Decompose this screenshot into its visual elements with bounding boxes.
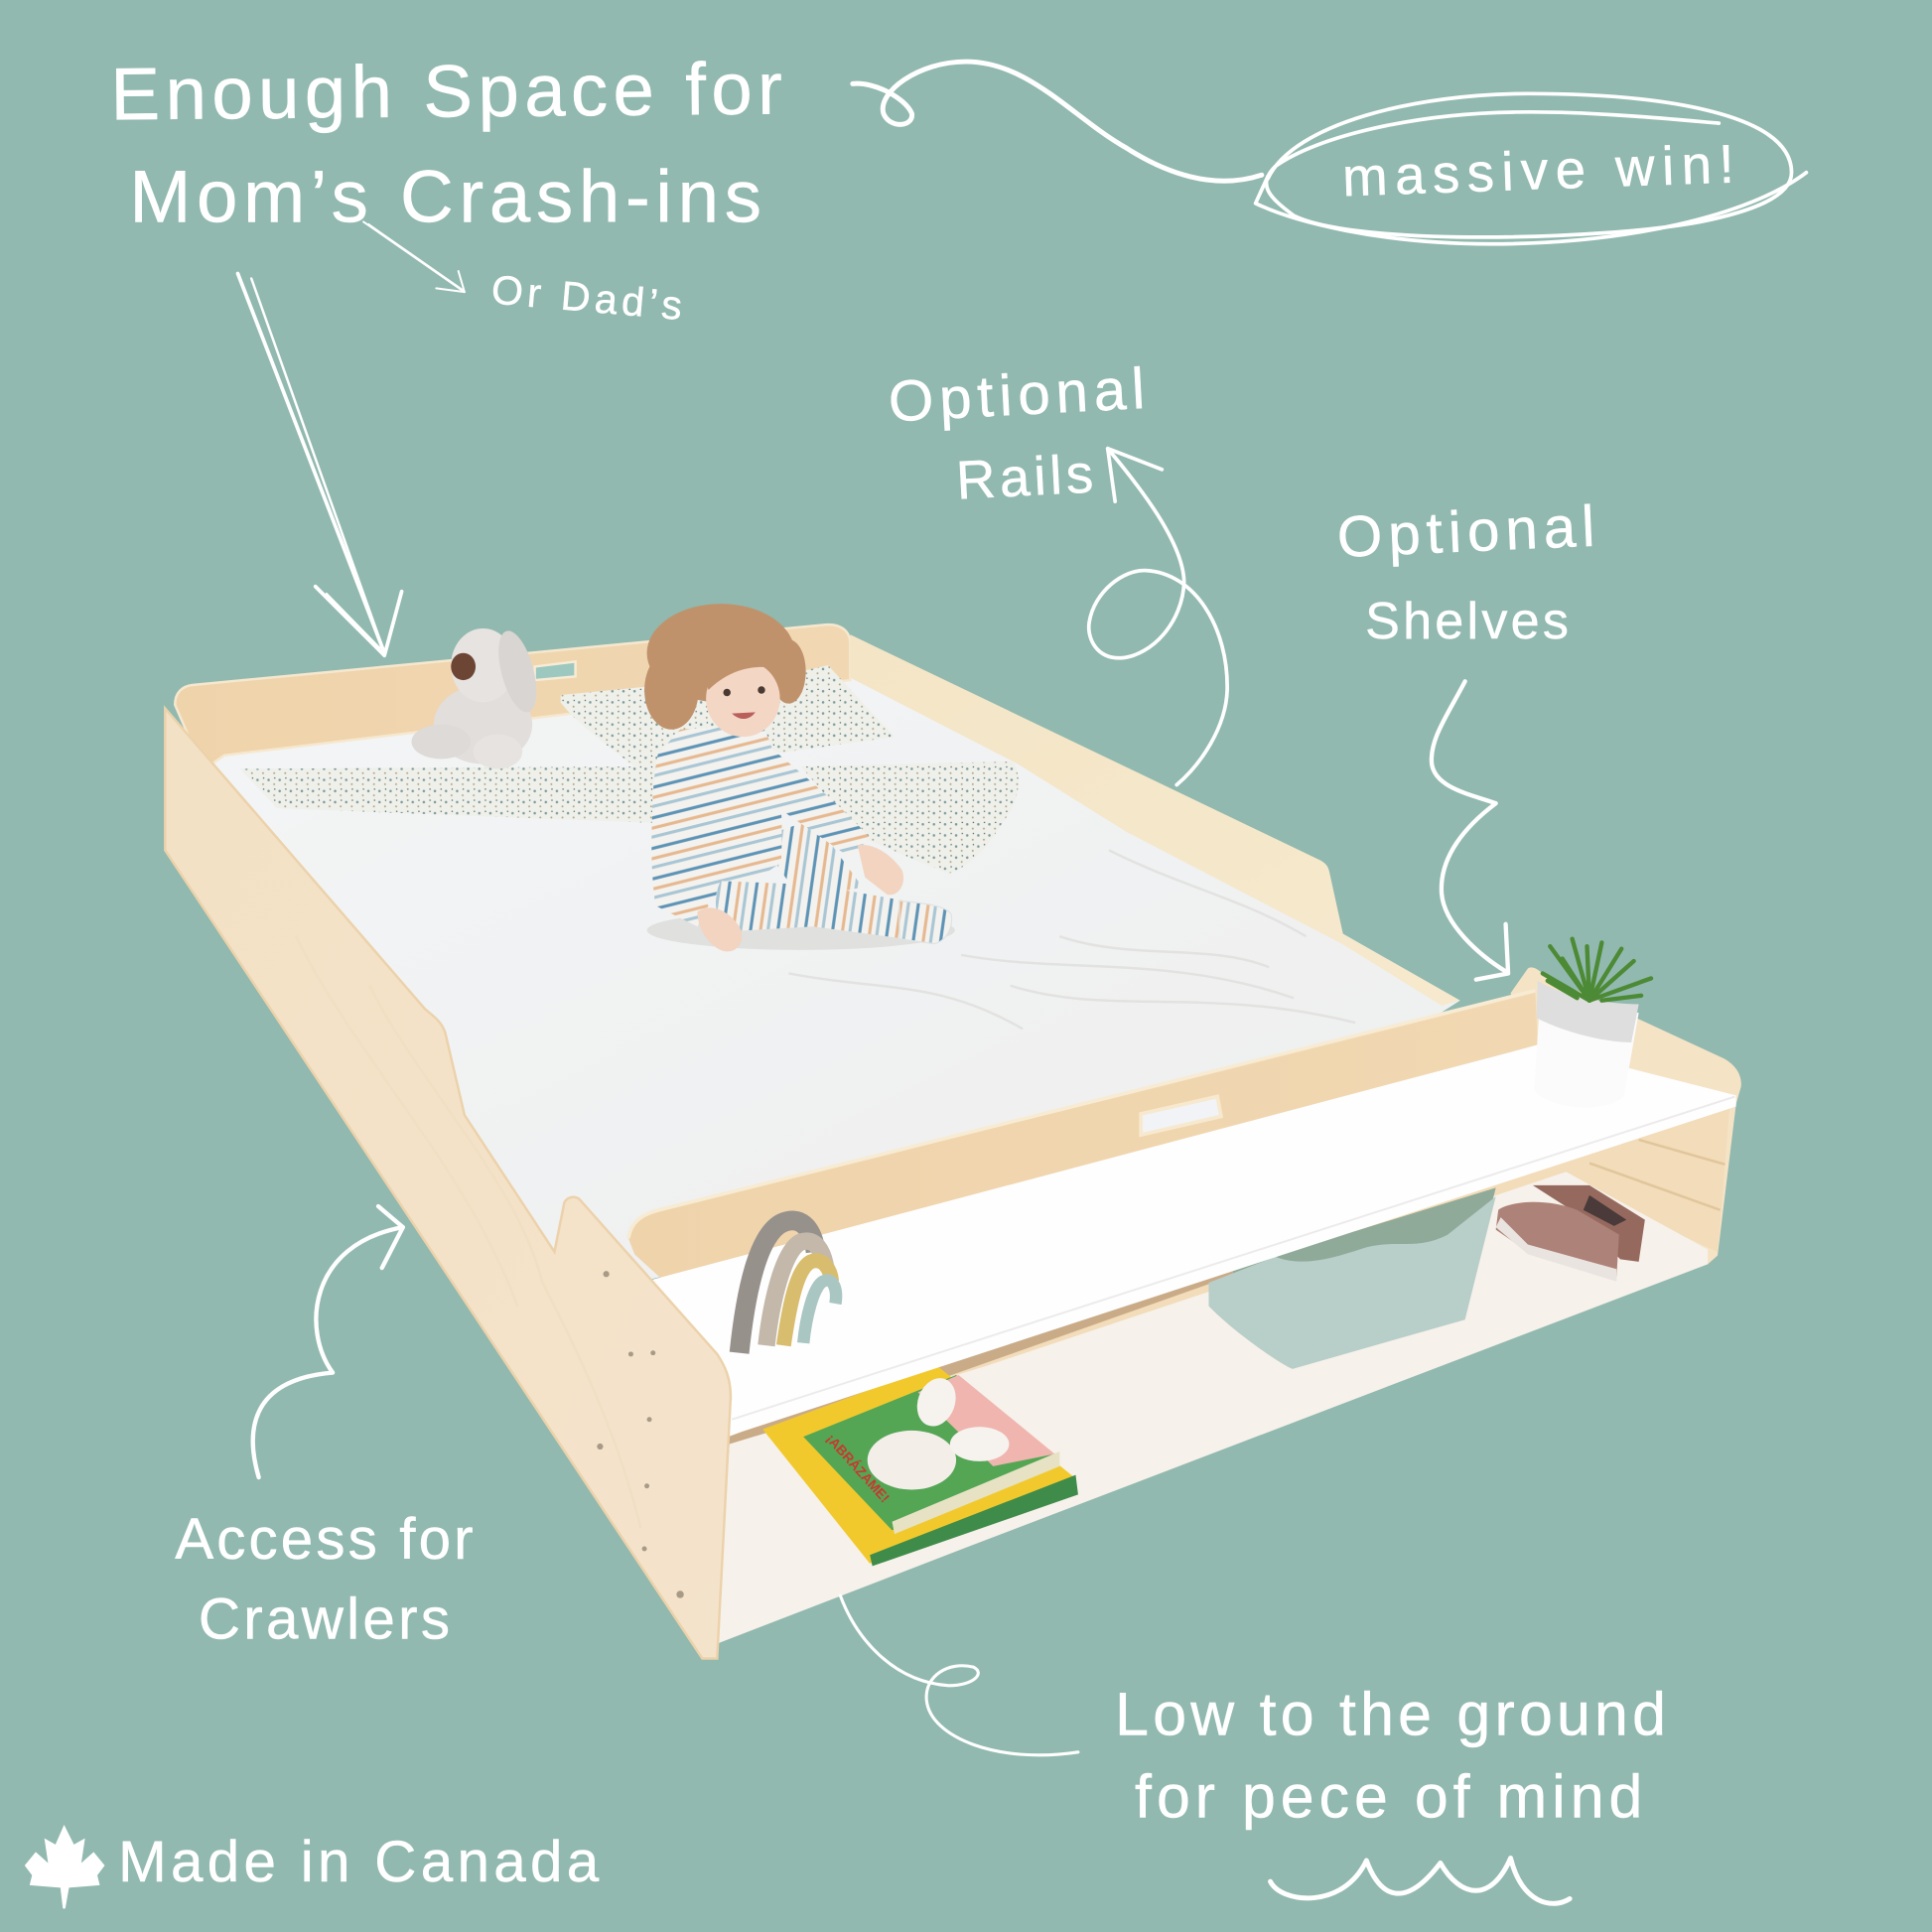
left side panel (165, 709, 731, 1658)
label: optional rails: Optional (887, 356, 1147, 434)
headboard handle (535, 661, 576, 680)
panel screw holes (597, 1271, 684, 1598)
storage bin (1208, 1187, 1496, 1369)
label: access for crawlers (175, 1507, 474, 1652)
left arm (651, 755, 709, 926)
arrow: to crawl access (253, 1206, 403, 1477)
label: low to the ground: Low to the ground (1115, 1680, 1666, 1747)
arrow: mom's to dad's (363, 221, 465, 292)
shelf back wall (709, 1103, 1729, 1466)
rainbow stacking toy (740, 1220, 836, 1353)
label: optional shelves: Optional (1336, 494, 1596, 570)
hair (644, 604, 806, 730)
label: optional rails: Rails (955, 443, 1095, 511)
blanket (240, 761, 1019, 874)
hands (858, 845, 903, 895)
arrow: squiggle to massive win (853, 62, 1262, 181)
pillow (561, 665, 895, 771)
arrow: to low shelf (840, 1595, 1078, 1755)
headboard (175, 624, 850, 770)
shadow (647, 910, 955, 950)
shoes (1496, 1185, 1645, 1282)
mattress (204, 653, 1460, 1282)
label: optional rails (887, 356, 1147, 511)
heading line 1: Enough Space for (110, 47, 782, 135)
decorative wave underline (1271, 1859, 1570, 1903)
label: low to the ground (1115, 1680, 1666, 1831)
right end panel (1511, 967, 1741, 1264)
callout: massive win oval (1256, 93, 1806, 244)
toddler (644, 604, 955, 951)
board books (762, 1365, 1078, 1566)
aside: Or Dad’s (489, 266, 684, 329)
panel grain (296, 936, 640, 1528)
bed photo (165, 604, 1741, 1658)
back leg (758, 819, 863, 899)
callout text: massive win! (1341, 134, 1735, 207)
arrow: to shelves (1432, 681, 1508, 980)
icon: maple leaf (25, 1825, 104, 1908)
right side rail (850, 634, 1460, 1006)
bunny plush (412, 626, 544, 768)
arrow: to rail (1089, 449, 1227, 785)
face (706, 660, 780, 737)
back strip between shelves (715, 1220, 1355, 1458)
heading line 2: Mom’s Crash-ins (129, 155, 761, 237)
label: low to the ground: for pece of mind (1135, 1763, 1642, 1831)
foot (899, 900, 952, 944)
label: optional shelves: Shelves (1365, 593, 1569, 650)
plant pot (1534, 939, 1651, 1108)
mattress wrinkles (788, 850, 1355, 1029)
shelf slats (1589, 1140, 1725, 1210)
front leg (716, 881, 911, 939)
rail handle slot (1141, 1097, 1221, 1135)
top shelf (640, 1044, 1736, 1445)
lower shelf (717, 1172, 1708, 1644)
book spine title: ¡ABRÁZAME! (823, 1432, 893, 1505)
label: optional shelves (1336, 494, 1596, 650)
torso (652, 725, 781, 905)
front rail (628, 991, 1538, 1279)
right arm (752, 740, 870, 858)
arrow: to headboard (238, 274, 402, 655)
label: access for crawlers: Access for (175, 1507, 474, 1572)
label: access for crawlers: Crawlers (199, 1587, 450, 1652)
label: made in canada: Made in Canada (118, 1830, 600, 1894)
